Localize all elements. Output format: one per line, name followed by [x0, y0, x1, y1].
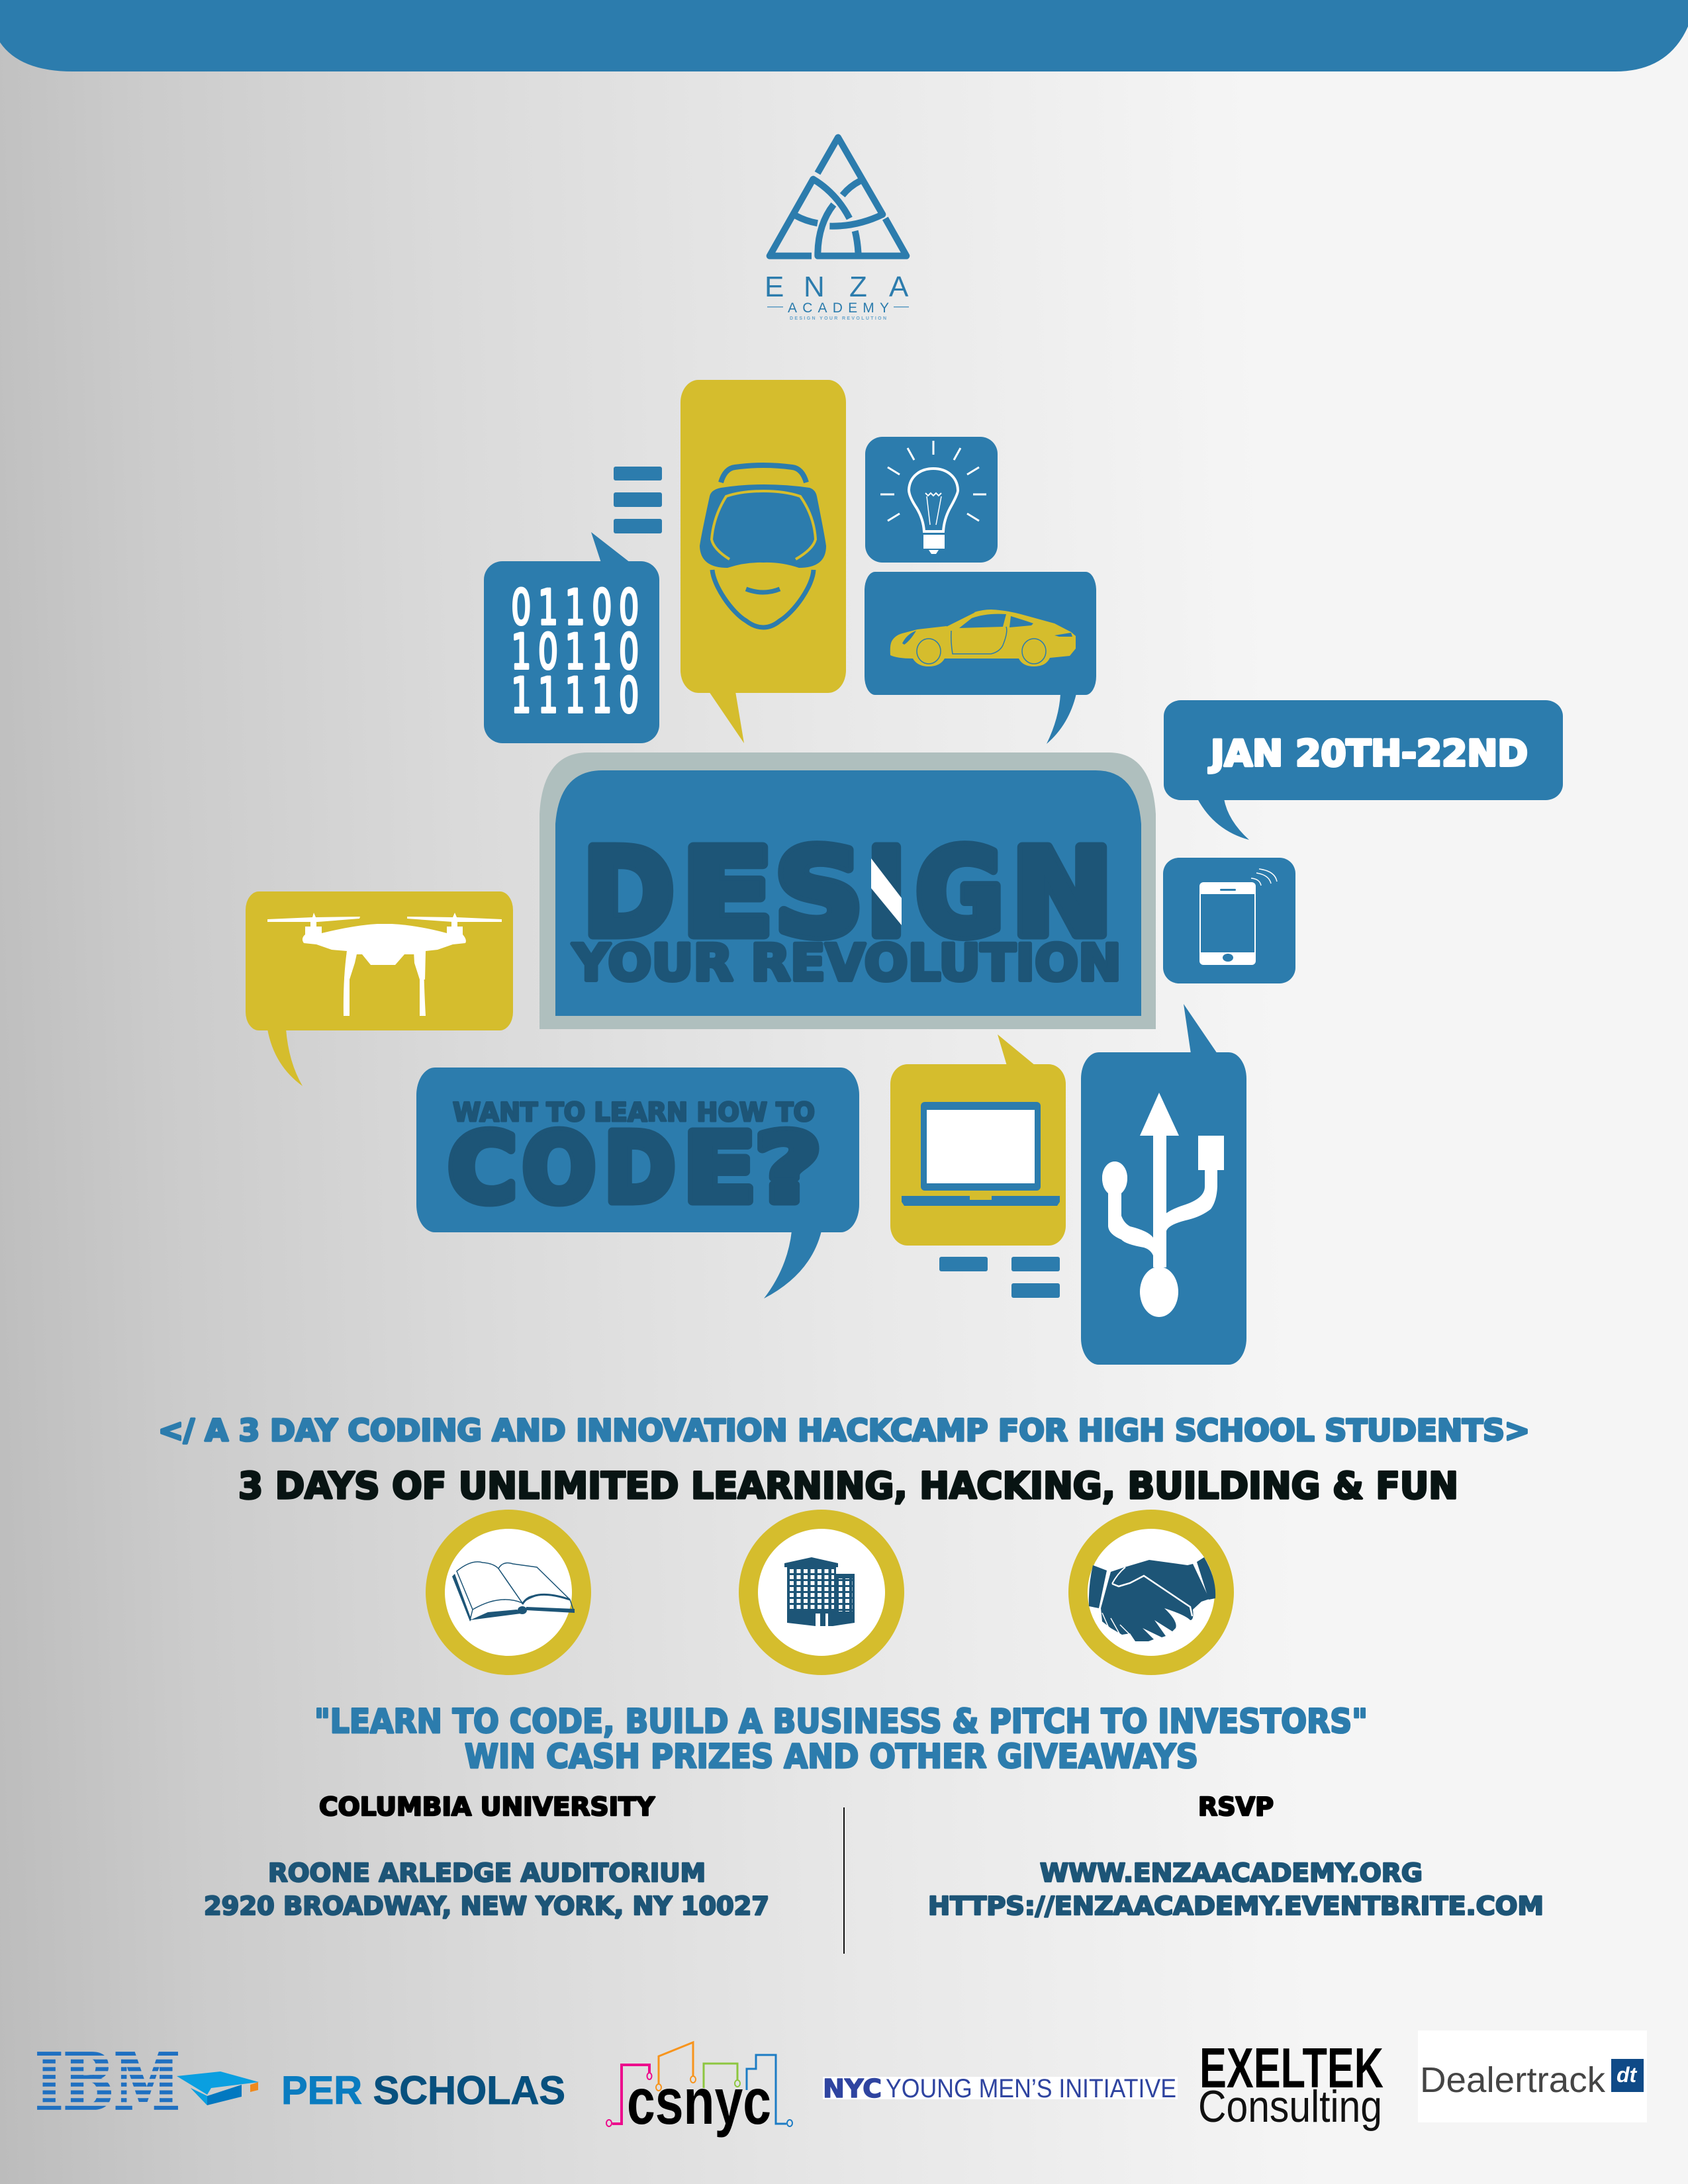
- icon: smartphone: [1199, 869, 1277, 965]
- icon: handshake in circle: [1068, 1510, 1234, 1675]
- logo: Per Scholas: [177, 2068, 565, 2113]
- title: DESIGN: E: [681, 823, 774, 963]
- callout: learn to code: "LEARN TO CODE, BUILD A BUSINESS & PITCH TO INVESTORS": [314, 1702, 1368, 1741]
- bubble: drone: [246, 891, 513, 1086]
- bubble: USB: [1081, 1004, 1246, 1365]
- logo: Dealertrack: [1418, 2030, 1647, 2122]
- bubble: want to learn to code: [416, 1068, 859, 1298]
- website: WWW.ENZAACADEMY.ORG: [1040, 1858, 1423, 1888]
- icon: light bulb: [880, 441, 986, 554]
- text: CODE?: ?: [755, 1113, 821, 1224]
- wordmark: PER SCHOLAS: [281, 2068, 565, 2113]
- decorative bars: below laptop: [939, 1257, 1060, 1298]
- title: DESIGN: D: [583, 823, 675, 963]
- logo subtitle: ACADEMY: [788, 300, 889, 316]
- eventbrite: HTTPS://ENZAACADEMY.EVENTBRITE.COM: [928, 1891, 1544, 1921]
- title: DESIGN: G: [915, 823, 1004, 963]
- bubble: binary code: [484, 532, 659, 743]
- bubble: date: [1164, 700, 1563, 840]
- logo: NYC Young Men's Initiative: NYC: [823, 2074, 882, 2103]
- logo: IBM: IBM: [35, 2036, 180, 2128]
- icon: VR headset: [700, 465, 826, 627]
- venue address: 2920 BROADWAY, NEW YORK, NY 10027: [204, 1891, 769, 1921]
- logo tagline: DESIGN YOUR REVOLUTION: [790, 316, 886, 321]
- date text: JAN 20TH-22ND: [1208, 733, 1528, 774]
- accent: white slash in I: [871, 858, 902, 925]
- logo: csnyc: [606, 2042, 792, 2138]
- bubble: yellow VR headset: [680, 380, 846, 743]
- heading: hackcamp tagline: </ A 3 DAY CODING AND INNOVATION HACKCAMP FOR HIGH SCHOOL STUDENTS>: [158, 1413, 1530, 1448]
- icon: USB symbol: [1102, 1093, 1224, 1317]
- logo: Dealertrack: dt: [1617, 2063, 1638, 2087]
- logo: Exeltek Consulting: [1198, 2037, 1383, 2132]
- logo: csnyc: csnyc: [627, 2065, 771, 2138]
- binary digits: 11110: [511, 667, 639, 724]
- heading: 3 days: 3 DAYS OF UNLIMITED LEARNING, HACKING, BUILDING & FUN: [238, 1465, 1458, 1507]
- binary digits: [511, 579, 639, 724]
- title: DESIGN: S: [774, 823, 863, 963]
- icon: book in circle: [426, 1510, 591, 1675]
- decorative bars: left of VR bubble: [614, 467, 662, 533]
- logo: Enza Academy: [765, 138, 909, 321]
- RSVP block: [928, 1792, 1544, 1921]
- text: CODE?: C: [447, 1113, 517, 1224]
- title: DESIGN: N: [1011, 823, 1113, 963]
- icon: graduation cap: [177, 2071, 259, 2105]
- panel: monitor with title: [539, 752, 1156, 1029]
- subtitle: YOUR REVOLUTION: YOUR REVOLUTION: [572, 933, 1121, 992]
- bubble: smartphone: [1163, 858, 1295, 983]
- text: CODE?: O: [522, 1113, 596, 1224]
- logo: Exeltek Consulting: EXELTEK: [1199, 2037, 1383, 2100]
- title: DESIGN: I: [866, 823, 907, 963]
- top header band: [0, 0, 1688, 71]
- icon: drone: [267, 913, 502, 1016]
- venue name: COLUMBIA UNIVERSITY: [319, 1792, 655, 1821]
- logo: Dealertrack: Dealertrack: [1420, 2060, 1606, 2100]
- icon: building in circle: [739, 1510, 904, 1675]
- venue hall: ROONE ARLEDGE AUDITORIUM: [268, 1858, 706, 1888]
- icon: car: [890, 610, 1076, 666]
- logo: NYC Young Men's Initiative: YOUNG MEN’S INITIATIVE: [886, 2074, 1176, 2103]
- binary digits: 01100: [511, 579, 639, 636]
- venue block: [204, 1792, 769, 1921]
- bubble: light bulb: [865, 437, 998, 563]
- icon: triangle knot: [770, 138, 906, 256]
- bubble: laptop: [890, 1034, 1066, 1246]
- logo wordmark: ENZA: [765, 271, 909, 303]
- binary digits: 10110: [511, 623, 639, 680]
- text: CODE?: E: [683, 1113, 756, 1224]
- text: CODE?: D: [604, 1113, 675, 1224]
- callout: prizes: WIN CASH PRIZES AND OTHER GIVEAWAYS: [465, 1737, 1198, 1776]
- icon: laptop: [902, 1102, 1060, 1206]
- RSVP heading: RSVP: [1198, 1792, 1274, 1821]
- logo: Exeltek Consulting: Consulting: [1198, 2081, 1382, 2132]
- bubble: sports car: [865, 572, 1096, 744]
- text: WANT TO LEARN HOW TO: WANT TO LEARN HOW TO: [453, 1098, 815, 1128]
